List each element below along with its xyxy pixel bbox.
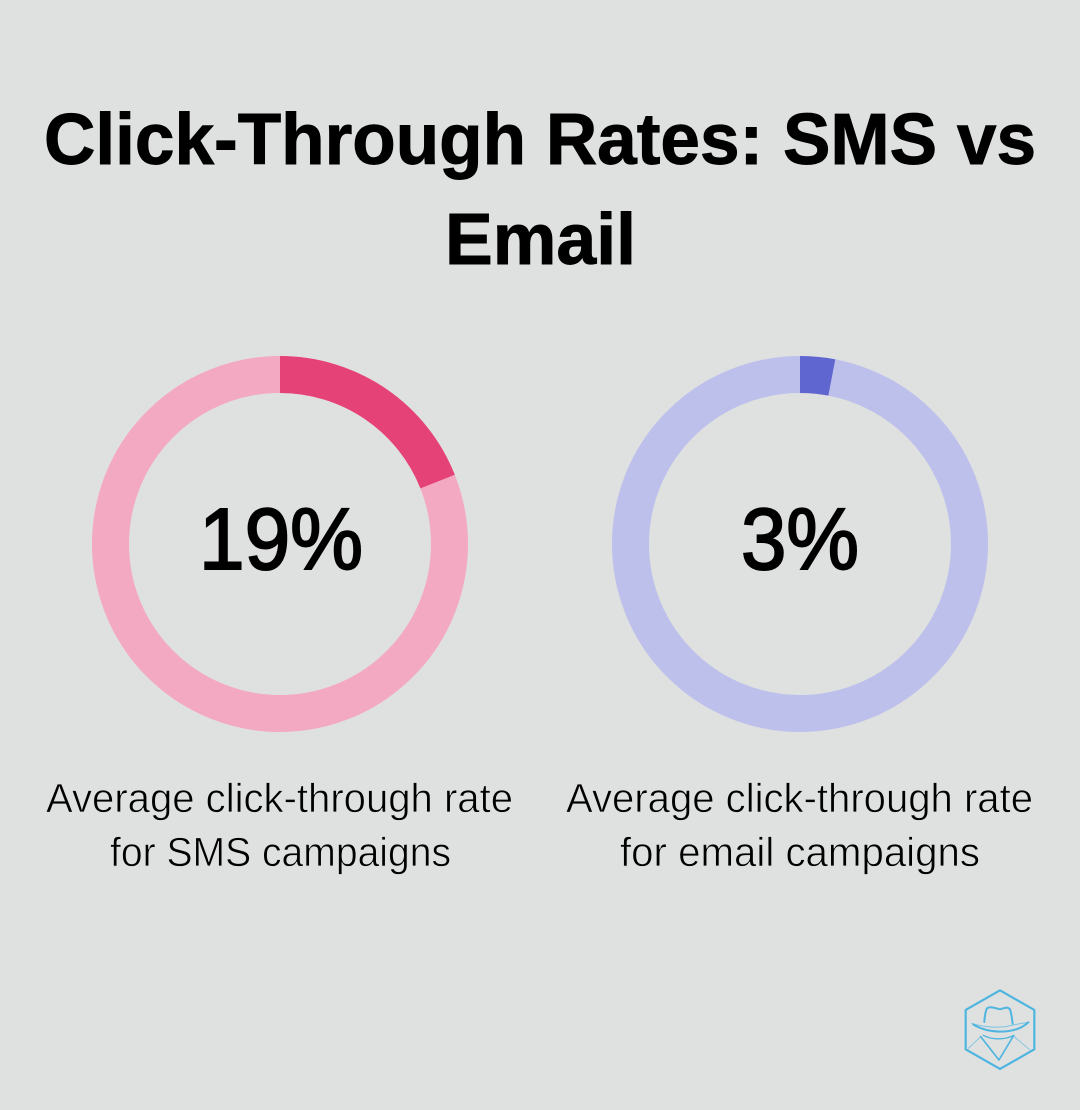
icon: logo hexagon with hat figure xyxy=(966,990,1034,1069)
panel: SMS campaigns xyxy=(46,374,513,875)
caption: email: for email campaigns xyxy=(620,829,980,875)
title: Click-Through Rates: SMS vs xyxy=(44,100,1036,180)
title xyxy=(44,100,1036,280)
donut chart: SMS 19% xyxy=(110,374,450,714)
title: Email xyxy=(445,200,636,280)
stat: 19%: 19% xyxy=(199,491,363,588)
caption: email: Average click-through rate xyxy=(566,775,1033,821)
caption: SMS: for SMS campaigns xyxy=(110,829,451,875)
donut chart: email 3% xyxy=(630,374,970,714)
caption: SMS: Average click-through rate xyxy=(46,775,513,821)
stat: 3%: 3% xyxy=(741,491,859,588)
panel: email campaigns xyxy=(566,374,1033,875)
caption: email xyxy=(566,775,1033,875)
caption: SMS xyxy=(46,775,513,875)
